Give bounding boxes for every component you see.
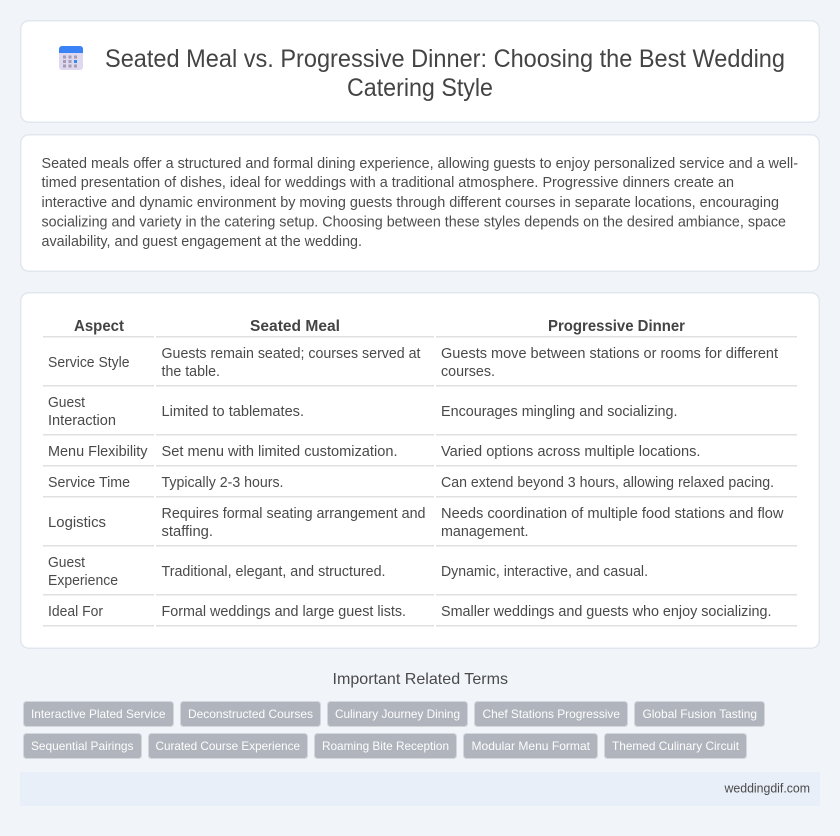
intro paragraph: interactive and dynamic environment by moving guests through different courses in separate locations, encouraging <box>42 195 779 211</box>
row: service style <box>48 346 778 380</box>
row: service style: Guests remain seated; courses served at <box>162 346 420 362</box>
intro paragraph: timed presentation of dishes, ideal for weddings with a traditional atmosphere. Progressive dinners create an <box>42 175 734 191</box>
tag <box>464 734 598 758</box>
row: service style: courses. <box>441 364 495 380</box>
row: guest experience: Dynamic, interactive, and casual. <box>441 564 648 580</box>
row: guest experience: Experience <box>48 573 118 589</box>
row: logistics <box>48 506 784 540</box>
tag: Deconstructed Courses <box>188 707 313 721</box>
row: logistics: staffing. <box>162 524 213 540</box>
intro paragraph: socializing and variety in the catering setup. Choosing between these styles depends on the desired ambiance, space <box>42 214 786 230</box>
icon: calendar <box>59 46 83 70</box>
footer bar <box>20 772 820 806</box>
row: guest interaction: Guest <box>48 395 85 411</box>
row: guest experience <box>48 555 648 589</box>
row: logistics: Needs coordination of multiple food stations and flow <box>441 506 784 522</box>
row: menu flexibility <box>48 444 700 460</box>
tag: Modular Menu Format <box>472 739 591 753</box>
row: guest experience: Guest <box>48 555 85 571</box>
row: guest interaction: Limited to tablemates. <box>162 404 304 420</box>
tag <box>604 734 746 758</box>
tag <box>24 734 142 758</box>
tag <box>148 734 308 758</box>
row: logistics: Requires formal seating arrangement and <box>162 506 426 522</box>
tag <box>180 702 320 726</box>
tag <box>328 702 468 726</box>
row: ideal for <box>48 604 772 620</box>
tag: Interactive Plated Service <box>31 707 166 721</box>
row: guest interaction: Interaction <box>48 413 116 429</box>
row: logistics: Logistics <box>48 515 106 531</box>
row: logistics: management. <box>441 524 528 540</box>
tag: Sequential Pairings <box>31 739 134 753</box>
tag <box>634 702 764 726</box>
tag: Global Fusion Tasting <box>642 707 757 721</box>
intro paragraph <box>42 156 798 250</box>
row: service style: the table. <box>162 364 220 380</box>
tag <box>24 702 174 726</box>
row: service time: Typically 2-3 hours. <box>162 475 284 491</box>
intro paragraph: Seated meals offer a structured and formal dining experience, allowing guests to enjoy personalized service and a well- <box>42 156 798 172</box>
row: menu flexibility: Set menu with limited customization. <box>162 444 398 460</box>
title: Catering Style <box>347 74 493 102</box>
row: service time <box>48 475 774 491</box>
row: ideal for: Ideal For <box>48 604 103 620</box>
row: ideal for: Smaller weddings and guests who enjoy socializing. <box>441 604 772 620</box>
table header: Seated Meal <box>250 318 340 335</box>
tag <box>314 734 456 758</box>
footer bar: weddingdif.com <box>724 780 810 796</box>
related term tags <box>24 702 764 758</box>
tag <box>474 702 628 726</box>
row: guest interaction: Encourages mingling and socializing. <box>441 404 678 420</box>
table header: Progressive Dinner <box>548 318 685 335</box>
row: guest interaction <box>48 395 678 429</box>
tag: Culinary Journey Dining <box>335 707 460 721</box>
header panel <box>21 21 819 122</box>
table header: Aspect <box>74 318 125 335</box>
tag: Curated Course Experience <box>156 739 300 753</box>
row: guest experience: Traditional, elegant, and structured. <box>162 564 386 580</box>
tag: Themed Culinary Circuit <box>612 739 740 753</box>
table header <box>74 318 685 335</box>
row: menu flexibility: Varied options across multiple locations. <box>441 444 700 460</box>
tag: Chef Stations Progressive <box>482 707 620 721</box>
title: Seated Meal vs. Progressive Dinner: Choosing the Best Wedding <box>105 45 785 73</box>
row: service style: Guests move between stations or rooms for different <box>441 346 778 362</box>
row: service time: Service Time <box>48 475 130 491</box>
panel: introduction <box>21 135 819 271</box>
intro paragraph: availability, and guest engagement at the wedding. <box>42 234 362 250</box>
panel: comparison table <box>21 293 819 648</box>
row: ideal for: Formal weddings and large guest lists. <box>162 604 406 620</box>
row: menu flexibility: Menu Flexibility <box>48 444 148 460</box>
tag: Roaming Bite Reception <box>322 739 449 753</box>
heading: important related terms: Important Related Terms <box>332 671 508 688</box>
row: service style: Service Style <box>48 355 130 371</box>
title <box>105 45 785 102</box>
row: service time: Can extend beyond 3 hours, allowing relaxed pacing. <box>441 475 774 491</box>
